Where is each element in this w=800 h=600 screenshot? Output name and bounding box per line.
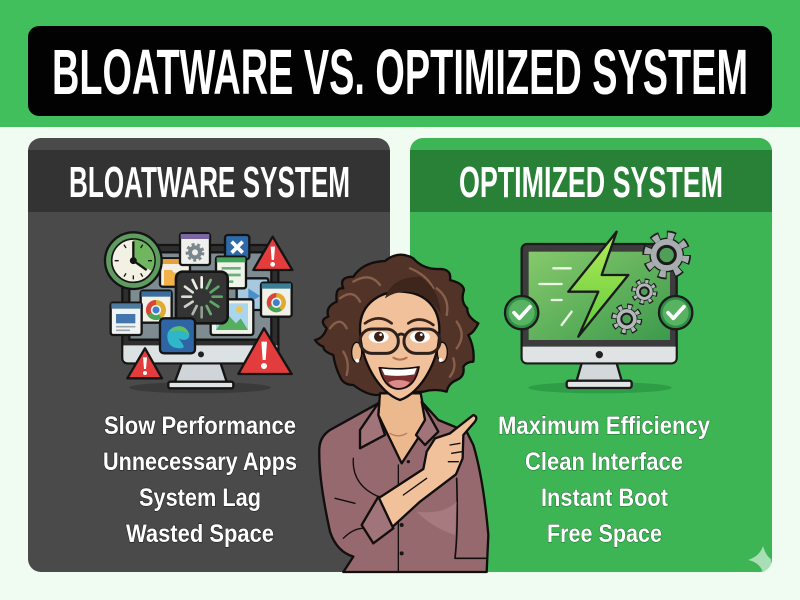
- icon: sparkle: [748, 546, 771, 572]
- list: bloatware drawbacks: [103, 412, 297, 548]
- icon: lightning bolt: [568, 232, 628, 337]
- icon: check badges: [505, 296, 692, 329]
- icon: browser windows: [111, 283, 292, 335]
- icon: overloaded monitor: [105, 232, 292, 393]
- shirt: [319, 402, 488, 572]
- face: [360, 292, 439, 400]
- icon: warning triangles: [127, 237, 292, 378]
- list: bloatware drawbacks: System Lag: [139, 484, 261, 512]
- list: optimized benefits: [498, 412, 710, 548]
- ears: [352, 342, 362, 362]
- forearm and pointing hand: [378, 415, 476, 528]
- list: bloatware drawbacks: Unnecessary Apps: [103, 448, 297, 476]
- hair: [315, 255, 478, 395]
- icon: small gears: [614, 281, 655, 332]
- cuff: [362, 497, 393, 543]
- front hair lock: [385, 277, 441, 313]
- icon: loading spinner: [176, 272, 228, 323]
- icon: edge tile: [160, 318, 195, 353]
- list: optimized benefits: Maximum Efficiency: [498, 412, 710, 440]
- glasses: [360, 329, 440, 353]
- icon: optimized monitor: [505, 232, 692, 393]
- eyebrows: [365, 318, 433, 325]
- panel heading: bloatware: BLOATWARE SYSTEM: [69, 158, 350, 207]
- panel: bloatware system: [28, 138, 390, 572]
- top green banner: [0, 0, 800, 127]
- eyes: [369, 331, 430, 343]
- list: bloatware drawbacks: Wasted Space: [126, 520, 274, 548]
- list: optimized benefits: Instant Boot: [541, 484, 669, 512]
- panel heading: bloatware: [28, 150, 390, 212]
- collar: [360, 402, 385, 448]
- panel: optimized system: [410, 138, 772, 572]
- mouth: [379, 367, 419, 389]
- panel heading: optimized: [410, 150, 772, 212]
- nose: [393, 358, 407, 360]
- icon: large gear: [647, 235, 687, 275]
- speed lines: [539, 268, 572, 325]
- character: presenter pointing: [315, 255, 488, 572]
- list: bloatware drawbacks: Slow Performance: [104, 412, 296, 440]
- list: optimized benefits: Clean Interface: [525, 448, 683, 476]
- neck: [378, 393, 427, 463]
- list: optimized benefits: Free Space: [547, 520, 662, 548]
- icon: clock: [105, 232, 162, 289]
